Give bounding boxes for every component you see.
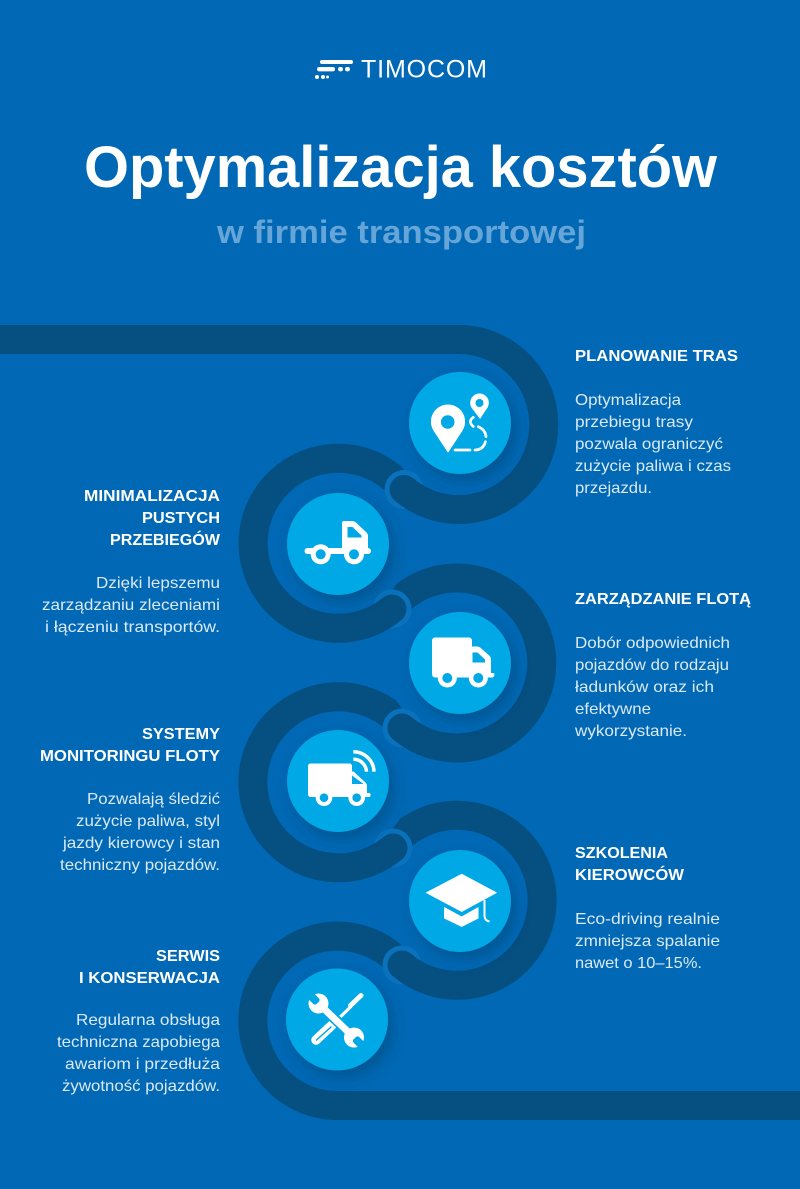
text block: fleet monitoring: SYSTEMY	[142, 726, 221, 743]
step 5: training circle	[409, 850, 511, 952]
text block: route planning: przebiegu trasy	[575, 414, 693, 431]
text block: route planning: zużycie paliwa i czas	[575, 458, 731, 475]
text block: empty runs: PRZEBIEGÓW	[110, 531, 220, 549]
text block: fleet management: pojazdów do rodzaju	[575, 657, 729, 674]
icon: graduation cap	[426, 874, 497, 927]
text block: driver training: zmniejsza spalanie	[575, 933, 720, 950]
text block: fleet monitoring: zużycie paliwa, styl	[76, 813, 220, 830]
text block: service and maintenance: żywotność pojazdów.	[62, 1078, 220, 1095]
title: Optymalizacja kosztów	[84, 135, 718, 200]
text block: fleet management: ładunków oraz ich	[575, 679, 714, 696]
icon: van with signal	[308, 752, 374, 806]
text block: service and maintenance: Regularna obsługa	[76, 1012, 220, 1029]
text block: route planning: Optymalizacja	[575, 392, 681, 409]
text block: empty runs: i łączeniu transportów.	[45, 619, 220, 636]
text block: fleet monitoring: jazdy kierowcy i stan	[62, 835, 220, 852]
text block: driver training: KIEROWCÓW	[575, 866, 684, 884]
text block: fleet management: efektywne	[575, 701, 651, 718]
step 1: route planning circle	[409, 372, 511, 474]
logo: TIMOCOM	[315, 56, 487, 84]
text block: fleet management: wykorzystanie.	[574, 723, 687, 740]
text block: fleet management: ZARZĄDZANIE FLOTĄ	[575, 591, 751, 608]
logo mark	[315, 60, 353, 79]
icon: tractor truck	[304, 521, 371, 564]
step 3: fleet circle	[409, 612, 511, 714]
text block: service and maintenance	[57, 948, 220, 1095]
text block: driver training: nawet o 10–15%.	[575, 955, 702, 972]
text block: route planning: PLANOWANIE TRAS	[575, 348, 738, 365]
text block: driver training	[575, 845, 720, 972]
text block: empty runs: Dzięki lepszemu	[96, 575, 220, 592]
text block: fleet monitoring	[40, 726, 221, 874]
text block: service and maintenance: awariom i przedłuża	[65, 1056, 220, 1073]
text block: route planning: pozwala ograniczyć	[575, 436, 723, 453]
text block: service and maintenance: techniczna zapobiega	[57, 1034, 220, 1051]
text block: service and maintenance: I KONSERWACJA	[79, 970, 220, 987]
winding road path	[0, 339, 800, 1106]
text block: fleet management	[574, 591, 751, 740]
text block: driver training: Eco-driving realnie	[575, 911, 720, 928]
text block: empty runs: PUSTYCH	[142, 510, 220, 527]
text block: fleet monitoring: Pozwalają śledzić	[87, 791, 220, 808]
icon: delivery truck	[432, 638, 494, 688]
text block: driver training: SZKOLENIA	[575, 845, 668, 862]
text block: empty runs: zarządzaniu zleceniami	[42, 597, 220, 614]
text block: empty runs: MINIMALIZACJA	[84, 488, 220, 505]
logo wordmark: TIMOCOM	[361, 56, 487, 84]
text block: fleet management: Dobór odpowiednich	[575, 635, 730, 652]
text block: empty runs	[42, 488, 220, 636]
icon: wrench and screwdriver	[302, 987, 371, 1054]
step 6: maintenance circle	[286, 968, 388, 1070]
text block: route planning: przejazdu.	[575, 480, 652, 497]
step 4: monitoring circle	[287, 730, 389, 832]
icon: map pins with dashed route	[431, 394, 488, 452]
text block: fleet monitoring: techniczny pojazdów.	[60, 857, 220, 874]
text block: route planning	[575, 348, 738, 497]
subtitle: w firmie transportowej	[216, 214, 586, 250]
text block: fleet monitoring: MONITORINGU FLOTY	[40, 748, 221, 765]
step 2: tractor unit circle	[287, 493, 389, 595]
text block: service and maintenance: SERWIS	[156, 948, 220, 965]
